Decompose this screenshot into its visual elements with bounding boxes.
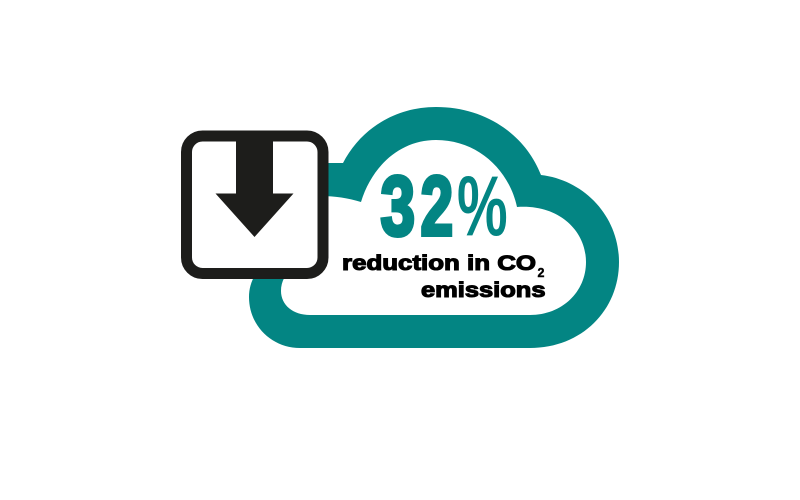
digit 3: 3 [380, 159, 415, 253]
caption: reduction in CO2 emissions [342, 252, 546, 302]
down arrow [216, 136, 294, 237]
icon: cloud outline [249, 107, 619, 348]
big number: 32% [380, 159, 508, 254]
square frame [186, 136, 323, 274]
icon: down arrow in rounded square [186, 136, 323, 274]
subscript 2: 2 [538, 266, 544, 280]
caption line 1: reduction in CO [342, 252, 536, 275]
caption line 2: emissions [421, 279, 546, 302]
percent sign: % [457, 160, 508, 254]
digit 2: 2 [420, 160, 453, 254]
